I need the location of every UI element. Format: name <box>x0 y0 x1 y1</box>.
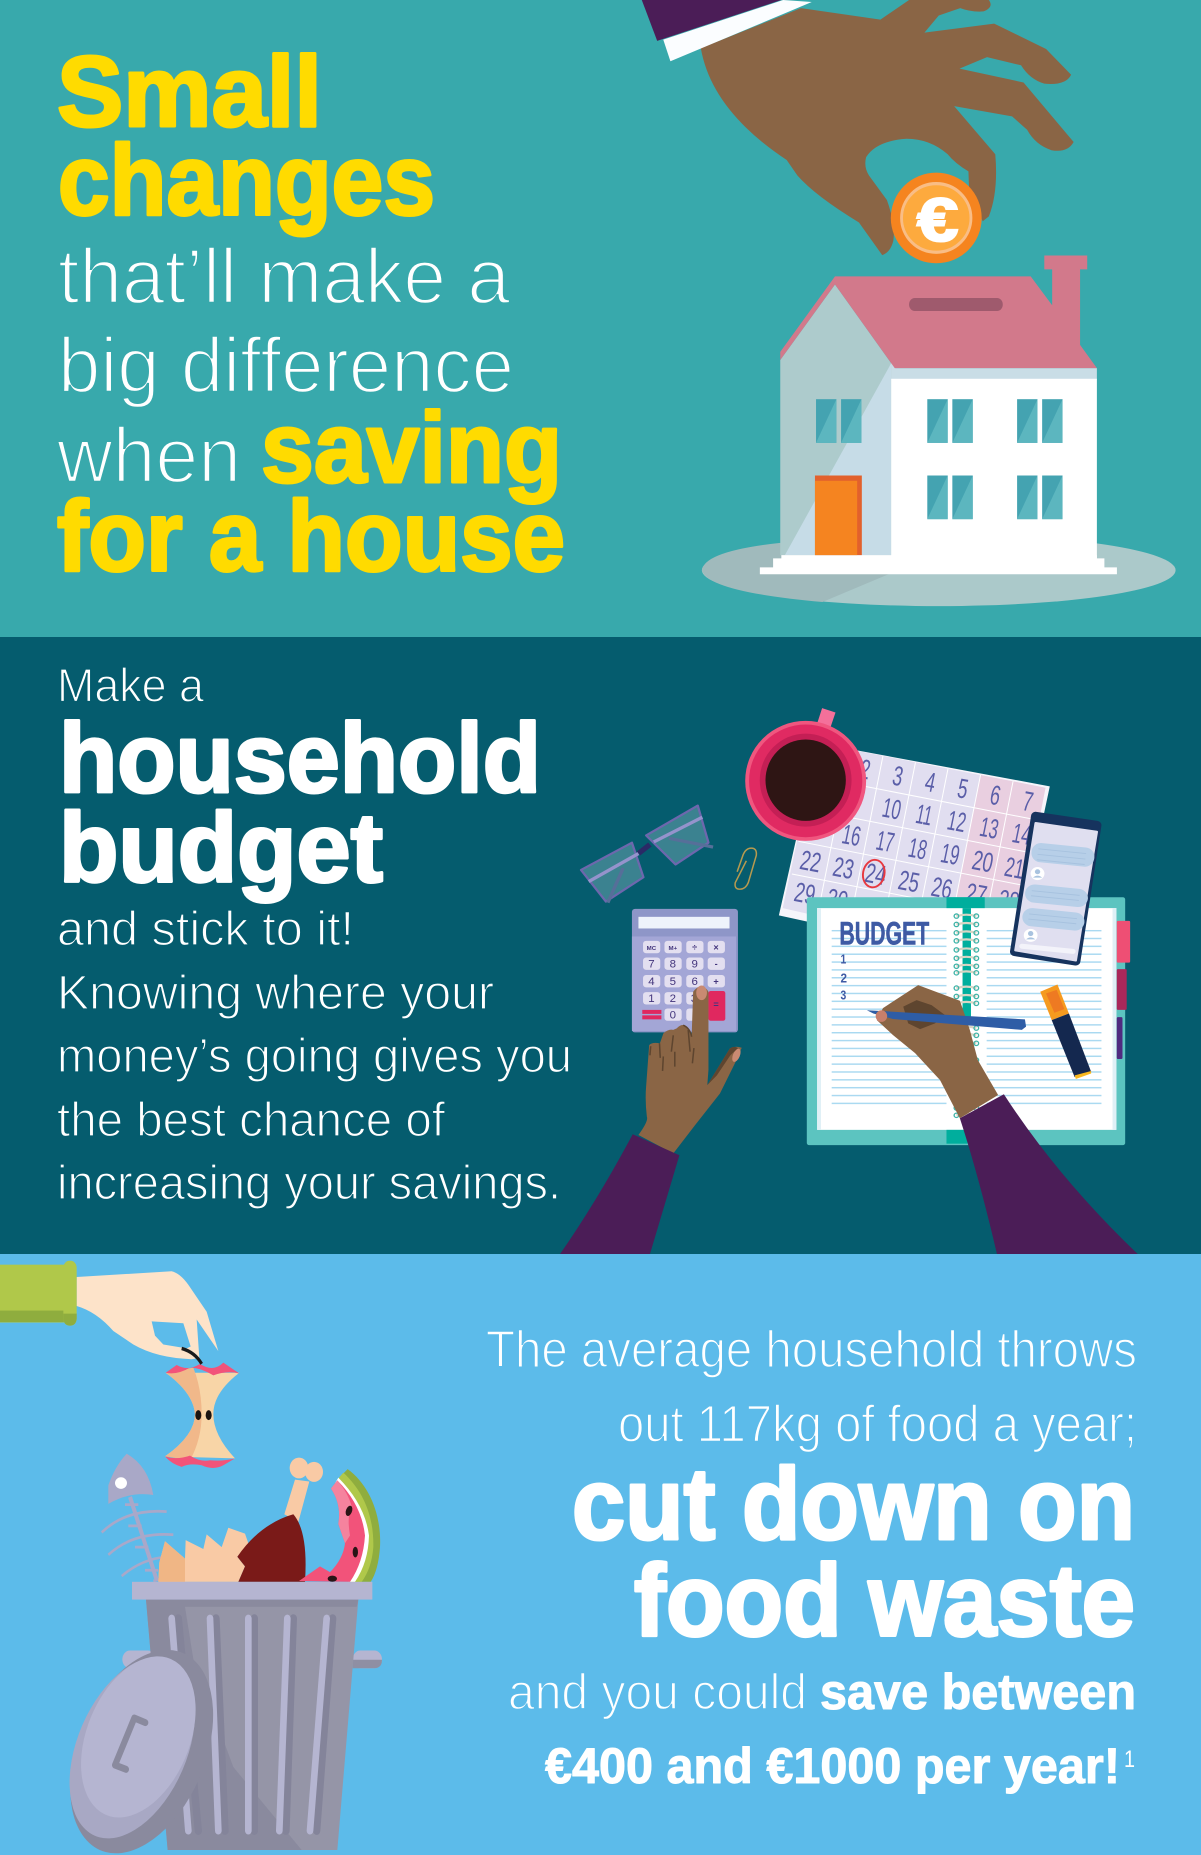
calendar: 12 <box>945 805 969 839</box>
calendar: 28 <box>995 884 1022 918</box>
apple core <box>165 1348 239 1468</box>
mobile phone <box>1015 816 1097 961</box>
illustration: budgeting desk <box>560 708 1138 1254</box>
fingernail <box>876 1010 887 1022</box>
right sleeve <box>960 1094 1138 1254</box>
chicken bone and meat <box>158 1458 323 1582</box>
calculator: 6 <box>691 976 698 988</box>
dustbin <box>122 1582 382 1850</box>
calendar: 2 <box>857 754 873 786</box>
calculator: 4 <box>648 976 655 988</box>
open budget notebook: 3 <box>840 988 846 1002</box>
heading: small changes: for a house <box>57 480 565 592</box>
euro coin: € <box>917 187 958 255</box>
hand holding apple core <box>77 1271 218 1359</box>
calendar: 25 <box>896 865 922 899</box>
calendar: 18 <box>905 832 930 866</box>
heading: small changes: that’ll make a <box>58 232 511 320</box>
panel: food waste <box>0 1254 1201 1855</box>
calendar: 14 <box>1010 818 1034 852</box>
pen <box>867 1010 1026 1030</box>
open budget notebook: BUDGET <box>839 915 929 951</box>
calculator: 5 <box>670 976 676 988</box>
calendar: 11 <box>913 799 935 832</box>
panel: saving for a house <box>0 0 1201 637</box>
left sleeve <box>560 1134 679 1254</box>
calculator: MC <box>647 946 657 952</box>
calculator: 7 <box>648 959 655 970</box>
heading and text: household budget: budget <box>59 792 383 902</box>
heading and text: household budget: household <box>59 703 541 813</box>
calculator: 2 <box>670 993 676 1005</box>
text: cut down on food waste: €400 and €1000 per year! <box>545 1738 1120 1794</box>
heading and text: household budget <box>57 659 572 1210</box>
calculator: 1 <box>648 993 655 1005</box>
heading: small changes: big difference <box>58 321 514 409</box>
calendar: 16 <box>839 819 864 853</box>
calendar: 3 <box>890 760 906 793</box>
heading and text: household budget: increasing your savings. <box>57 1157 561 1210</box>
calendar: 23 <box>830 851 857 886</box>
calculator: × <box>713 942 719 952</box>
calendar: 19 <box>938 838 962 872</box>
calendar: 20 <box>969 845 996 879</box>
heading: small changes: when <box>56 411 241 499</box>
illustration: food going into a bin <box>0 1261 382 1855</box>
ground shadow <box>702 534 1176 606</box>
calendar: 17 <box>873 825 897 859</box>
panel: household budget <box>0 637 1201 1254</box>
text: cut down on food waste: cut down on <box>572 1447 1135 1561</box>
calculator: + <box>713 977 719 986</box>
heading: small changes: changes <box>58 125 435 237</box>
euro coin <box>891 173 982 263</box>
calculator: ÷ <box>692 943 697 953</box>
calculator: 9 <box>691 959 698 970</box>
fish skeleton <box>102 1454 185 1581</box>
text: cut down on food waste: The average household throws <box>486 1321 1137 1379</box>
calendar: 7 <box>1020 786 1036 818</box>
watermelon slice <box>299 1469 380 1582</box>
open budget notebook <box>807 897 1130 1145</box>
calendar: 24 <box>862 858 889 892</box>
left hand pressing calculator <box>638 986 742 1153</box>
calendar: 27 <box>963 878 989 912</box>
calendar: 26 <box>928 871 955 906</box>
coffee cup <box>745 708 866 841</box>
text: cut down on food waste <box>486 1321 1137 1794</box>
text: cut down on food waste: food waste <box>634 1544 1135 1658</box>
heading: small changes: Small <box>57 36 322 148</box>
calendar: 4 <box>922 767 938 799</box>
heading and text: household budget: and stick to it! <box>57 903 354 956</box>
house <box>760 256 1117 574</box>
illustration: hand dropping coin into house money box <box>642 0 1176 606</box>
text: cut down on food waste: and you could <box>508 1664 807 1720</box>
hand <box>701 0 1074 255</box>
text: cut down on food waste: out 117kg of food a year; <box>618 1396 1137 1454</box>
calculator: 0 <box>670 1010 676 1022</box>
calendar: 21 <box>1002 852 1027 886</box>
heading and text: household budget: Knowing where your <box>57 967 494 1020</box>
calendar <box>779 743 1050 966</box>
calculator: = <box>713 1000 719 1010</box>
heading and text: household budget: money’s going gives you <box>57 1030 572 1083</box>
paperclip <box>735 848 756 889</box>
heading and text: household budget: Make a <box>57 659 205 712</box>
sleeve <box>642 0 781 41</box>
text: cut down on food waste: 1 <box>1124 1746 1135 1773</box>
calendar: 5 <box>955 773 971 806</box>
calculator: 8 <box>670 959 676 970</box>
calendar: 6 <box>987 780 1003 812</box>
calendar: 22 <box>797 845 824 879</box>
shirt cuff <box>663 0 812 61</box>
open budget notebook: 1 <box>840 952 847 967</box>
calculator <box>632 909 738 1032</box>
calculator: M+ <box>669 946 678 952</box>
calculator: 3 <box>691 993 697 1005</box>
calendar: 29 <box>791 877 818 911</box>
text: cut down on food waste: save between <box>820 1664 1136 1720</box>
glasses <box>581 806 713 903</box>
green sleeve <box>0 1261 77 1326</box>
highlighter <box>1040 984 1091 1079</box>
open budget notebook: 2 <box>840 971 847 985</box>
heading: small changes: saving <box>261 392 562 504</box>
calendar: 30 <box>824 883 851 917</box>
heading and text: household budget: the best chance of <box>57 1094 446 1147</box>
right hand writing <box>877 985 998 1118</box>
calendar: 10 <box>879 792 904 826</box>
bin lid <box>41 1621 243 1855</box>
calculator: - <box>715 959 718 969</box>
calendar: 13 <box>977 812 1001 846</box>
heading: small changes <box>56 36 565 592</box>
